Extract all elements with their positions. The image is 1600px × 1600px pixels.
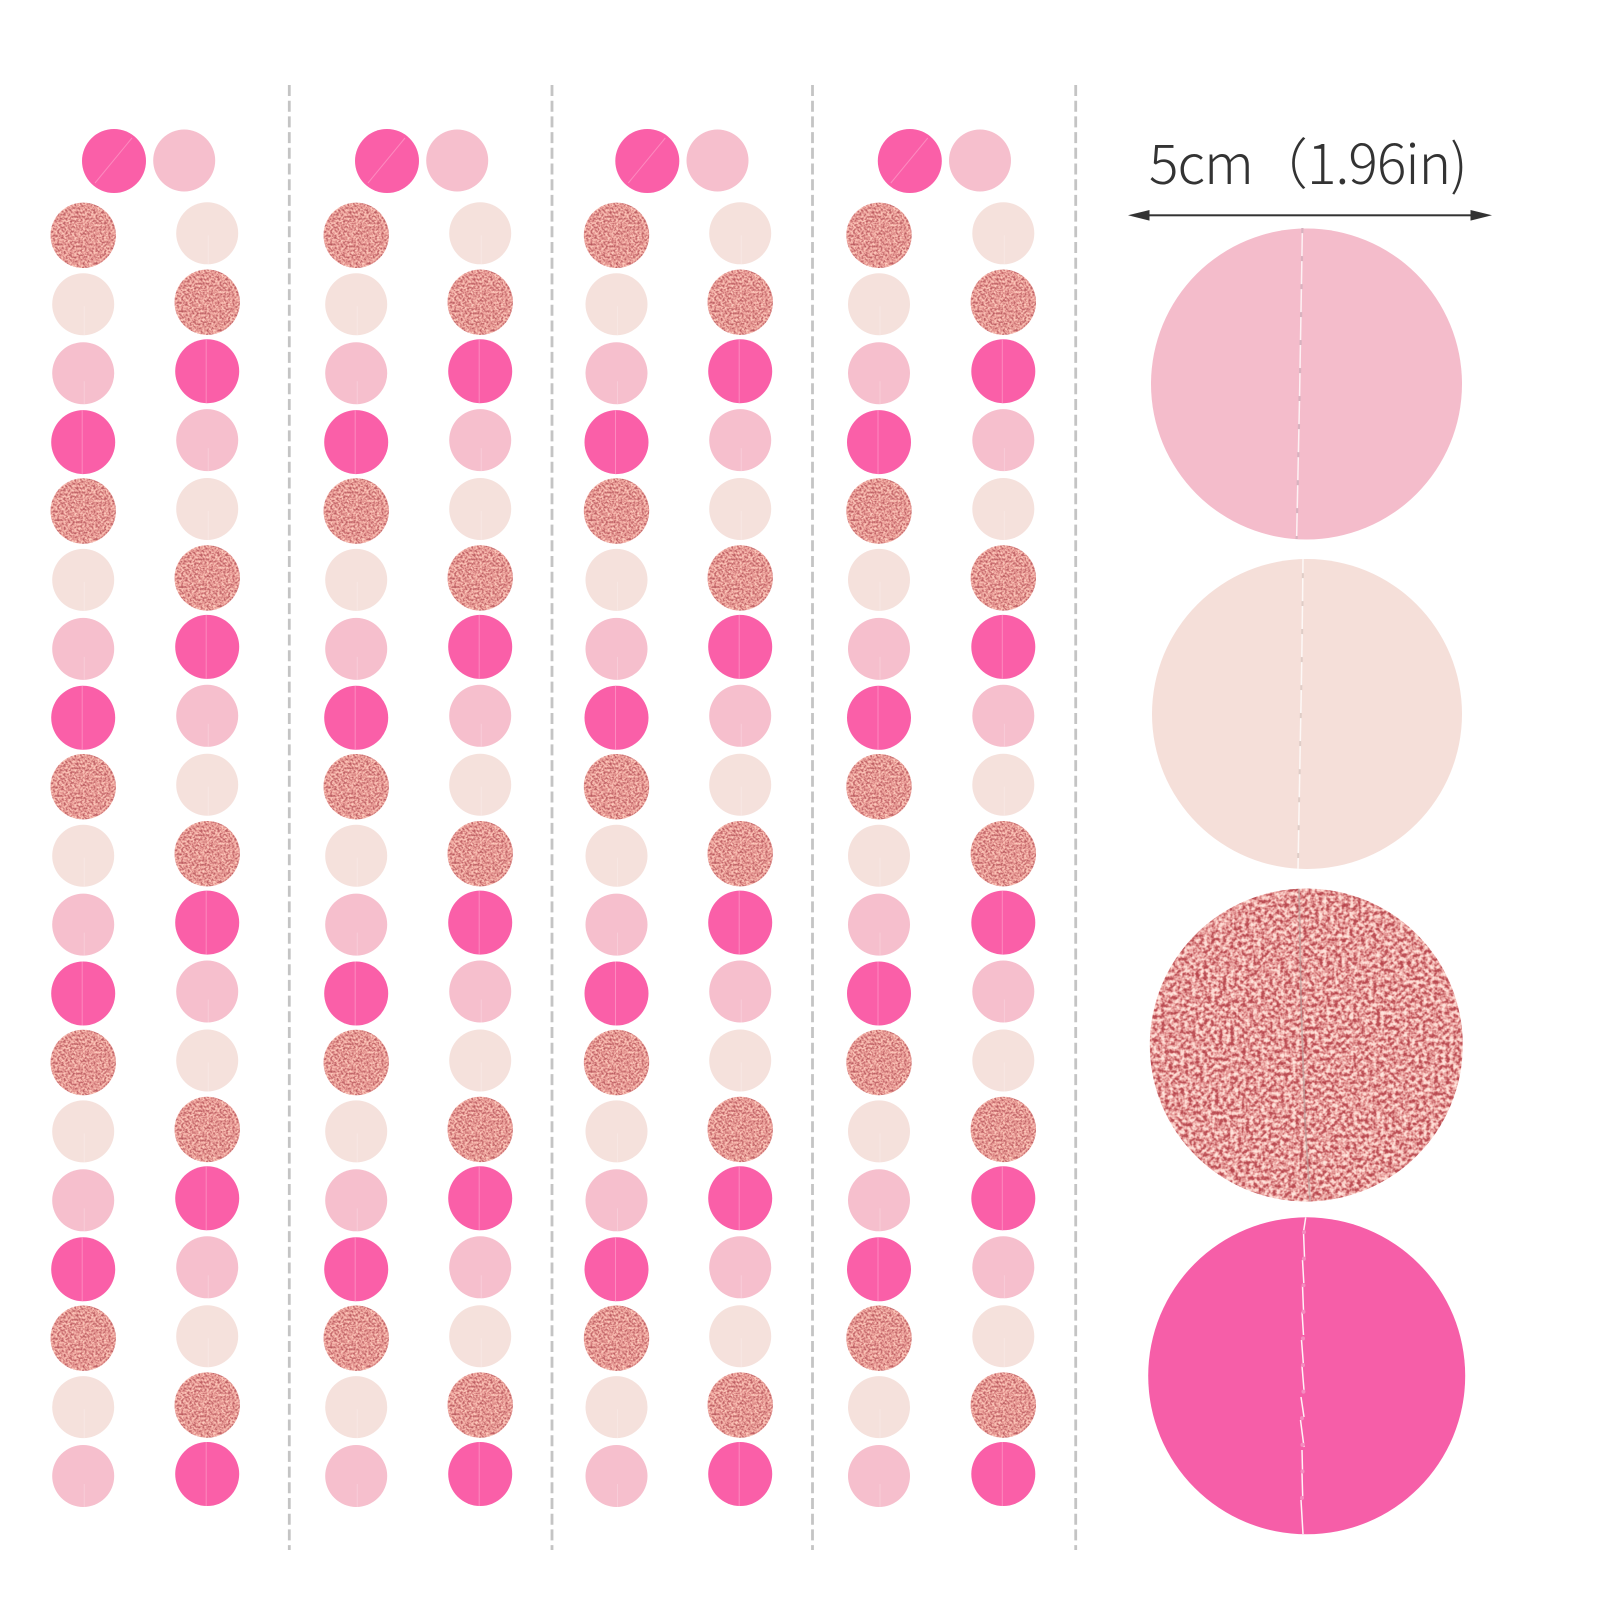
large circle: rose gold glitter [1150, 888, 1463, 1202]
divider lines [289, 85, 1076, 1550]
strand 1 right column of circles [174, 202, 240, 1506]
strand 4 top joining circles [878, 129, 1011, 193]
strand 1 top joining circles [82, 129, 215, 193]
garland strand 3 [584, 129, 773, 1507]
garland strand 4 [846, 129, 1036, 1507]
arrow: width dimension [1128, 210, 1492, 221]
strand 1 left column of circles [50, 203, 116, 1507]
strand 4 right column of circles [971, 202, 1036, 1506]
large circle: hot pink [1148, 1217, 1465, 1534]
size label: 5cm（1.96in) [1149, 120, 1467, 200]
garland strand 1 [50, 129, 240, 1507]
large circle: light pink [1151, 228, 1462, 540]
strand 3 left column of circles [584, 203, 649, 1507]
strand 2 left column of circles [324, 203, 389, 1507]
strand 2 right column of circles [448, 202, 513, 1506]
large circle: cream [1152, 559, 1462, 869]
strand 3 right column of circles [708, 202, 773, 1506]
strand 4 left column of circles [846, 203, 912, 1507]
strand 2 top joining circles [355, 129, 488, 193]
garland strand 2 [324, 129, 513, 1507]
strand 3 top joining circles [615, 129, 748, 193]
